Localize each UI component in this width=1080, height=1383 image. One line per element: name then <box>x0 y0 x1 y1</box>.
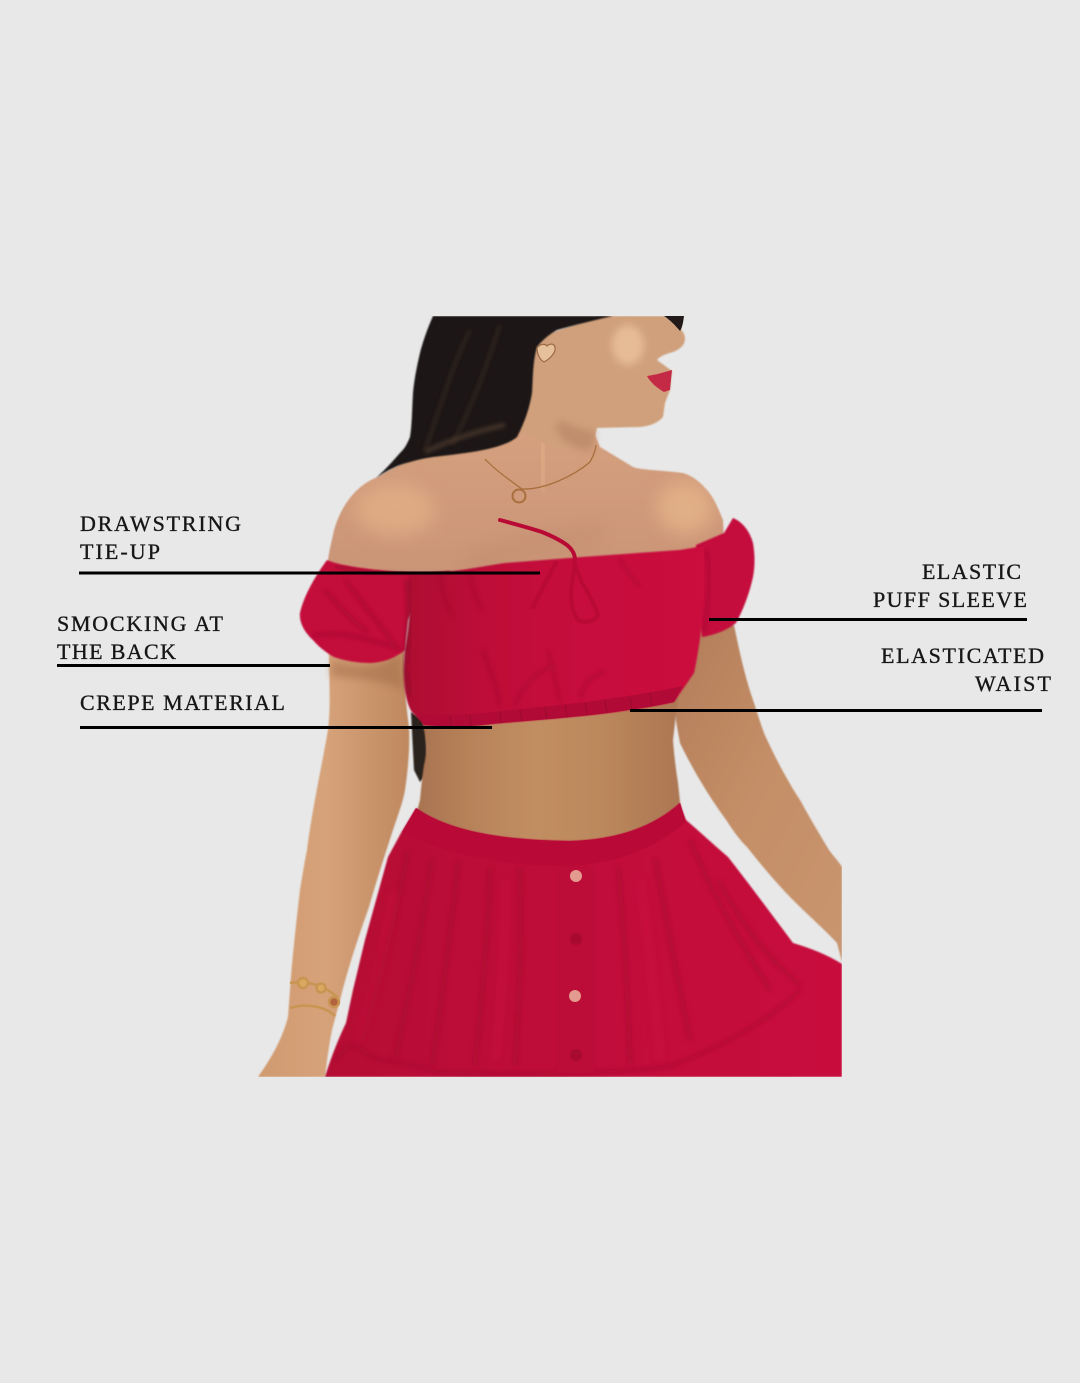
leader line <box>79 572 540 574</box>
shoulder highlights <box>357 444 714 537</box>
bodice gathers <box>484 560 639 703</box>
label text: ELASTICATED <box>881 643 1044 668</box>
label text: WAIST <box>975 671 1052 696</box>
skirt <box>325 803 842 1077</box>
bodice hem elastic <box>418 686 683 726</box>
neck and shoulders <box>327 432 724 572</box>
bodice hem ruching <box>450 693 652 726</box>
neck shading <box>555 420 596 450</box>
arm shadow under sleeve <box>326 658 402 688</box>
label text <box>881 643 1052 696</box>
hair strands <box>425 325 505 452</box>
callout: crepe material <box>80 690 492 729</box>
button placket <box>569 870 582 1061</box>
callout: elasticated waist <box>630 643 1052 712</box>
skirt pleats <box>362 840 800 1065</box>
leader line <box>80 726 492 729</box>
face <box>531 316 686 436</box>
elastic neckline gather <box>335 566 450 575</box>
right arm <box>670 625 842 962</box>
left puff sleeve <box>300 560 450 663</box>
callout: drawstring tie-up <box>79 511 540 574</box>
label text <box>80 511 241 564</box>
leader line <box>709 618 1027 621</box>
bodice shadow seam <box>404 580 410 695</box>
left sleeve folds <box>313 580 402 650</box>
label text: TIE-UP <box>80 539 160 564</box>
necklace <box>485 445 596 502</box>
label text: THE BACK <box>57 639 176 664</box>
hair at brow <box>664 316 684 331</box>
torso midriff <box>417 700 682 841</box>
cheek highlight <box>612 325 644 365</box>
label text: ELASTIC <box>922 559 1021 584</box>
callout: elastic puff sleeve <box>709 559 1027 621</box>
buttons <box>569 870 582 1061</box>
skirt waistband <box>402 803 686 860</box>
label text: SMOCKING AT <box>57 611 224 636</box>
bracelets <box>290 978 339 1016</box>
label text <box>873 559 1027 612</box>
label text: CREPE MATERIAL <box>80 690 285 715</box>
leader line <box>57 664 330 667</box>
skirt pleat highlights <box>360 880 660 1060</box>
lips <box>647 370 672 392</box>
left arm and hand <box>258 650 409 1077</box>
hair <box>376 316 613 478</box>
callout: smocking at the back <box>57 611 330 667</box>
label text <box>57 611 224 664</box>
infographic canvas <box>57 316 1051 1077</box>
earring <box>537 344 555 362</box>
right sleeve fold <box>704 550 710 632</box>
bodice <box>404 546 704 726</box>
drawstring tie <box>500 520 598 622</box>
label text: PUFF SLEEVE <box>873 587 1027 612</box>
label text: DRAWSTRING <box>80 511 241 536</box>
skirt tier seam <box>460 990 800 1077</box>
model photo illustration <box>258 316 842 1077</box>
leader line <box>630 709 1042 712</box>
right puff sleeve <box>696 518 754 637</box>
hair behind waist <box>411 712 428 782</box>
